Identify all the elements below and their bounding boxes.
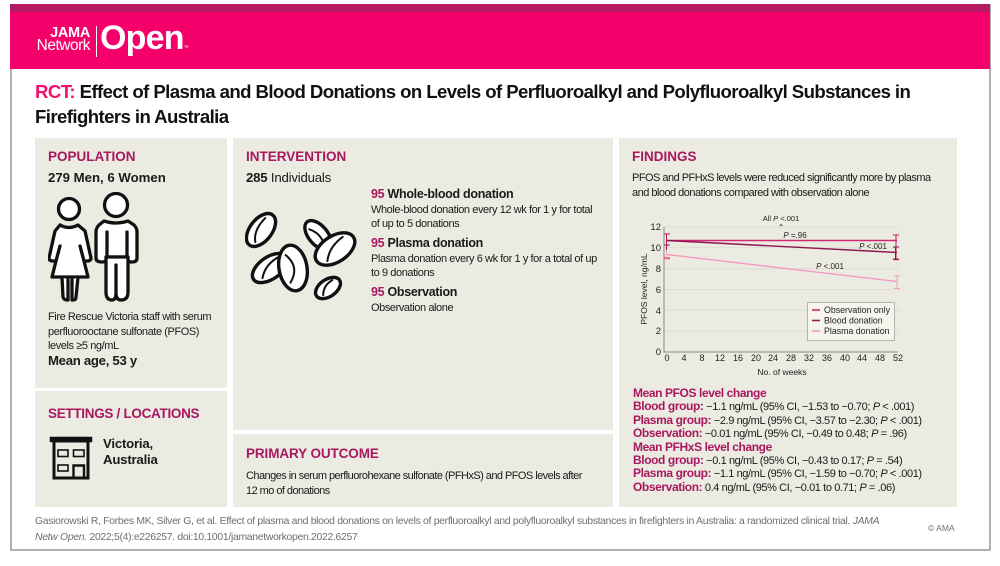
logo: JAMA Network Open (37, 19, 189, 57)
line chart: PFOS level by week: 20 (751, 353, 761, 363)
legend: Blood donation (824, 316, 883, 326)
line chart: PFOS level by week: 12 (715, 353, 725, 363)
line chart: PFOS level by week: 4 (681, 353, 687, 363)
line chart: PFOS level by week: 24 (768, 353, 778, 363)
location name: Victoria, (103, 436, 153, 451)
population count: 279 Men, 6 Women (48, 170, 166, 185)
line chart: PFOS level by week (639, 214, 903, 377)
findings summary: and blood donations compared with observation alone (632, 186, 869, 198)
mean level changes: Mean PFHxS level change (633, 440, 772, 454)
line chart: PFOS level by week: PFOS level, ng/mL (639, 253, 649, 325)
title: Firefighters in Australia (35, 106, 229, 127)
line chart: PFOS level by week: P <.001 (816, 262, 844, 271)
line chart: PFOS level by week: 12 (650, 222, 661, 233)
legend: Plasma donation (824, 326, 890, 336)
logo: JAMA Network Open: Open™ (100, 19, 189, 57)
population description (48, 311, 211, 352)
heading: intervention: INTERVENTION (246, 149, 346, 164)
citation: Gasiorowski R, Forbes MK, Silver G, et al. Effect of plasma and blood donations on levels of perfluoroalkyl and polyfluoroalkyl substances in firefighters in Australia: a randomized clinical trial. JAMA (35, 516, 879, 527)
arm: observation (371, 285, 457, 314)
mean level changes: Observation: 0.4 ng/mL (95% CI, −0.01 to 0.71; P = .06) (633, 480, 895, 494)
line chart: PFOS level by week: All P <.001 (763, 214, 799, 223)
mean level changes: Plasma group: −2.9 ng/mL (95% CI, −3.57 to −2.30; P < .001) (633, 413, 922, 427)
arm: whole-blood donation: Whole-blood donation every 12 wk for 1 y for total (371, 204, 592, 216)
legend (808, 302, 894, 340)
heading: findings: FINDINGS (632, 149, 697, 164)
heading: settings: SETTINGS / LOCATIONS (48, 406, 199, 421)
location name: Australia (103, 452, 158, 466)
population description: levels ≥5 ng/mL (48, 340, 119, 352)
title (35, 81, 910, 127)
mean level changes: Blood group: −1.1 ng/mL (95% CI, −1.53 to −0.70; P < .001) (633, 399, 914, 413)
line chart: PFOS level by week: 52 (893, 353, 903, 363)
logo: JAMA Network Open: Network (37, 37, 90, 54)
line chart: PFOS level by week: 10 (650, 243, 661, 254)
mean age: Mean age, 53 y (48, 353, 137, 368)
heading: population: POPULATION (48, 149, 136, 164)
citation: Netw Open. 2022;5(4):e226257. doi:10.1001/jamanetworkopen.2022.6257 (35, 532, 357, 542)
line chart: PFOS level by week: 6 (656, 285, 661, 296)
primary outcome text: Changes in serum perfluorohexane sulfonate (PFHxS) and PFOS levels after (246, 470, 582, 482)
line chart: PFOS level by week: 0 (664, 353, 670, 363)
icon: blood cells (245, 212, 357, 300)
heading: primary outcome: PRIMARY OUTCOME (246, 446, 379, 461)
mean level changes: Mean PFOS level change (633, 386, 766, 400)
header top stripe (10, 4, 990, 12)
line chart: PFOS level by week: 8 (699, 353, 705, 363)
title: RCT: Effect of Plasma and Blood Donations on Levels of Perfluoroalkyl and Polyfluoroalkyl Substances in (35, 81, 910, 102)
icon: building (50, 436, 92, 480)
series lines (667, 240, 897, 242)
line chart: PFOS level by week: 8 (656, 264, 661, 275)
population description: Fire Rescue Victoria staff with serum (48, 311, 211, 323)
arm: plasma donation (371, 236, 597, 279)
header banner (10, 4, 990, 69)
population description: perfluorooctane sulfonate (PFOS) (48, 326, 199, 338)
line chart: PFOS level by week: 2 (656, 326, 661, 337)
location name (103, 436, 158, 466)
individuals count: 285 Individuals (246, 170, 331, 185)
arm: plasma donation: Plasma donation every 6 wk for 1 y for a total of up (371, 252, 597, 264)
panel: settings / locations (35, 391, 227, 507)
arm: observation: 95 Observation (371, 285, 457, 299)
line chart: PFOS level by week: 40 (840, 353, 850, 363)
primary outcome text: 12 mo of donations (246, 484, 330, 496)
arm: whole-blood donation: of up to 5 donations (371, 218, 459, 230)
line chart: PFOS level by week: 4 (656, 306, 661, 317)
copyright: © AMA (928, 523, 955, 533)
line chart: PFOS level by week: P =.96 (783, 231, 807, 240)
icon: woman and man (48, 192, 139, 302)
logo: JAMA Network Open: JAMA (50, 25, 90, 41)
mean level changes (633, 386, 922, 494)
mean level changes: Blood group: −0.1 ng/mL (95% CI, −0.43 to 0.17; P = .54) (633, 453, 902, 467)
mean level changes: Observation: −0.01 ng/mL (95% CI, −0.49 to 0.48; P = .96) (633, 426, 907, 440)
line chart: PFOS level by week: 16 (733, 353, 743, 363)
panel: findings (619, 138, 957, 507)
line chart: PFOS level by week: 0 (656, 347, 661, 358)
line chart: PFOS level by week: No. of weeks (757, 367, 807, 377)
arm: observation: Observation alone (371, 302, 453, 314)
citation (35, 516, 879, 542)
arm: plasma donation: 95 Plasma donation (371, 236, 483, 250)
error bars (664, 234, 900, 288)
panel: intervention (233, 138, 613, 430)
findings summary: PFOS and PFHxS levels were reduced significantly more by plasma (632, 172, 931, 184)
findings summary (632, 172, 932, 198)
arm: whole-blood donation: 95 Whole-blood donation (371, 187, 513, 201)
line chart: PFOS level by week: 28 (786, 353, 796, 363)
line chart: PFOS level by week: 48 (875, 353, 885, 363)
mean level changes: Plasma group: −1.1 ng/mL (95% CI, −1.59 to −0.70; P < .001) (633, 466, 922, 480)
arm: plasma donation: to 9 donations (371, 267, 434, 279)
arm: whole-blood donation (371, 187, 592, 230)
line chart: PFOS level by week: 44 (857, 353, 867, 363)
primary outcome text (246, 470, 582, 496)
panel: primary outcome (233, 434, 613, 507)
legend: Observation only (824, 305, 891, 315)
line chart: PFOS level by week: 32 (804, 353, 814, 363)
panel: population (35, 138, 227, 388)
line chart: PFOS level by week: 36 (822, 353, 832, 363)
line chart: PFOS level by week: P <.001 (859, 242, 887, 251)
